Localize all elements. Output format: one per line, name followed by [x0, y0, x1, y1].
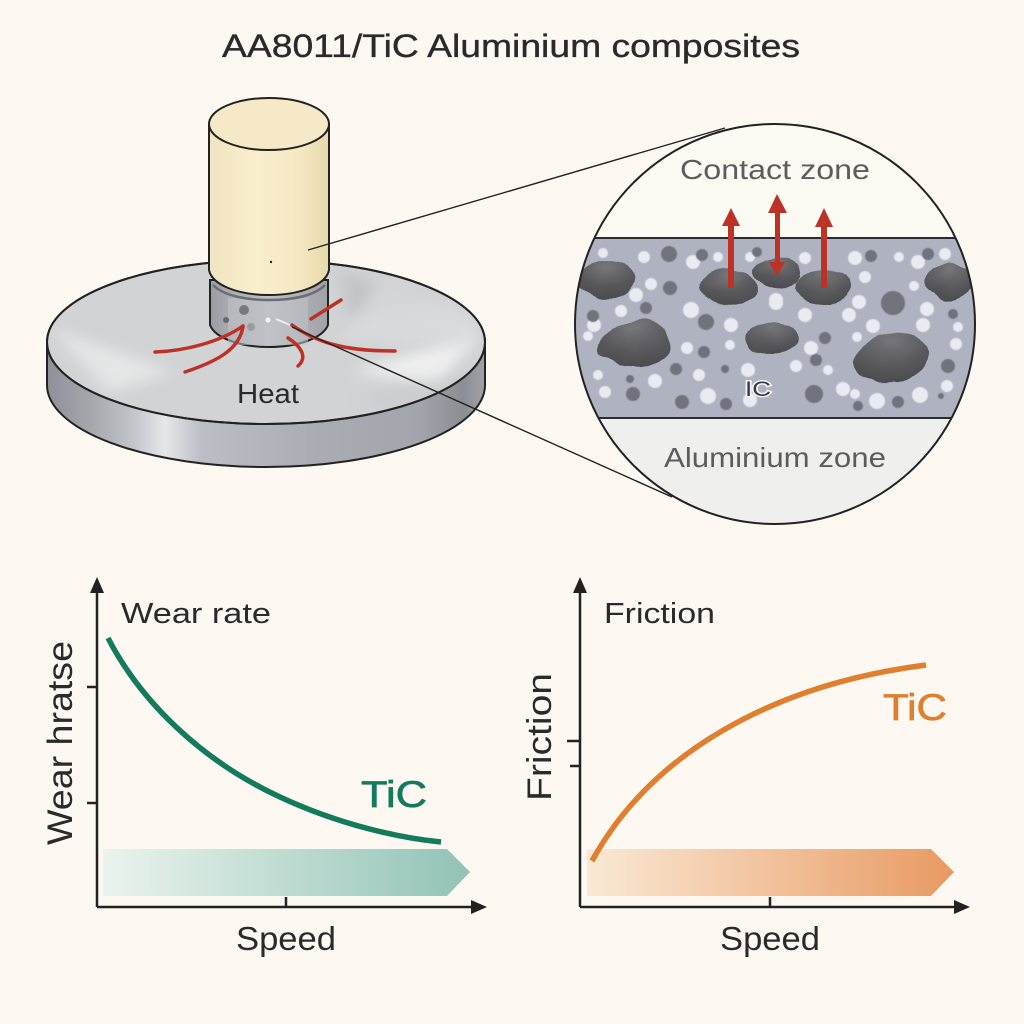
- speed gradient arrow: [103, 849, 470, 896]
- friction curve: [592, 665, 926, 861]
- wear curve: [108, 638, 441, 842]
- panel: lower aluminium zone: [600, 419, 950, 523]
- x axis label: Speed: [236, 920, 336, 957]
- heat flow lines: [155, 300, 395, 372]
- white particles: [583, 248, 963, 409]
- illustration: disc and pin test rig: [47, 98, 485, 467]
- red force arrows: [722, 194, 833, 288]
- label: aluminium zone: Aluminium zone: [664, 442, 886, 473]
- chart: wear rate vs speed: [41, 577, 487, 957]
- speed gradient arrow: [587, 849, 954, 896]
- y axis label: Wear hratse: [41, 641, 80, 845]
- disc: [47, 260, 485, 467]
- label: contact zone: Contact zone: [680, 154, 870, 185]
- label: heat: Heat: [237, 378, 299, 409]
- pin cylinder: [209, 98, 329, 300]
- large dark TiC clusters: [577, 257, 974, 382]
- axes: [567, 580, 967, 907]
- y axis label: Friction: [521, 673, 559, 801]
- curve label: TiC: [361, 774, 427, 815]
- axis arrowheads: [573, 577, 970, 914]
- magnified contact circle: [570, 124, 980, 528]
- curve label: TiC: [883, 687, 947, 728]
- zoom callout lines: [292, 128, 725, 497]
- chart: friction vs speed: [521, 577, 970, 957]
- label: TiC: IC: [745, 378, 771, 401]
- title: AA8011/TiC Aluminium composites: [222, 28, 800, 64]
- x axis label: Speed: [720, 920, 820, 957]
- axes: [87, 580, 484, 907]
- circle outline: [575, 124, 975, 524]
- panel: composite matrix band: [570, 238, 980, 418]
- chart title: Wear rate: [121, 598, 271, 630]
- collar: worn pin base: [210, 280, 328, 347]
- chart title: Friction: [604, 598, 715, 630]
- axis arrowheads: [90, 577, 487, 914]
- small dark particles: [587, 246, 958, 411]
